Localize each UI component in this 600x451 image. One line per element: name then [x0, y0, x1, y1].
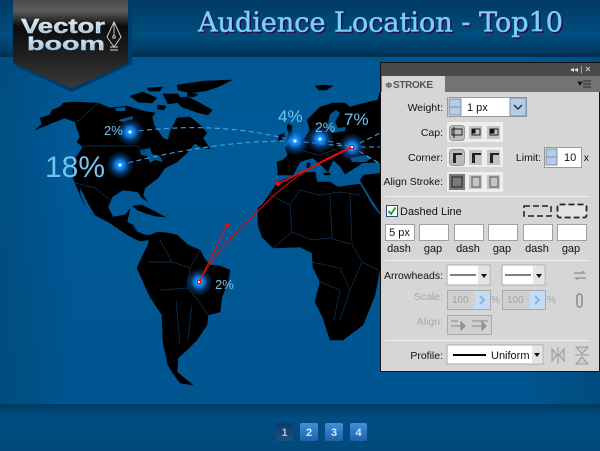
- europe and asia: [277, 90, 392, 175]
- dash and gap labels: dash: [456, 243, 480, 255]
- scale fields: %: [547, 295, 556, 306]
- logo badge: [13, 0, 132, 92]
- dash and gap labels: gap: [562, 243, 580, 255]
- logo wordmark: [21, 16, 105, 54]
- header band: [0, 0, 600, 57]
- dash and gap labels: [387, 227, 580, 255]
- percentage labels: 4%: [278, 107, 303, 126]
- percentage labels: 18%: [45, 151, 105, 184]
- dash and gap labels: dash: [387, 243, 411, 255]
- align arrow buttons: [448, 316, 492, 334]
- percentage labels: 2%: [104, 123, 123, 138]
- arrowhead dropdowns: [447, 265, 545, 285]
- footer band: [0, 404, 600, 451]
- glow marker: north america 2%: [116, 118, 144, 146]
- glow marker: europe 7%: [338, 133, 366, 161]
- panel labels: Align Stroke:: [383, 176, 443, 188]
- dash and gap labels: gap: [493, 243, 511, 255]
- panel labels: Weight:: [408, 102, 443, 114]
- dash and gap labels: 5 px: [389, 227, 410, 239]
- panel tab row: STROKE: [393, 80, 433, 91]
- country borders: [75, 103, 378, 345]
- great lakes: [115, 107, 163, 163]
- cap buttons: [447, 122, 503, 142]
- glow marker: europe 4%: [280, 126, 310, 156]
- scale fields: [448, 290, 556, 310]
- dash alignment icons: [524, 204, 586, 218]
- panel tab row: [381, 76, 600, 92]
- dash and gap labels: dash: [525, 243, 549, 255]
- limit field: 10: [564, 152, 576, 164]
- percentage labels: [45, 107, 369, 292]
- dashed line checkbox: Dashed Line: [400, 206, 462, 218]
- stroke panel: [380, 62, 600, 372]
- logo wordmark: boom: [27, 34, 105, 54]
- dash and gap fields: [386, 224, 586, 240]
- panel labels: Corner:: [408, 152, 443, 164]
- panel labels: x: [584, 152, 590, 164]
- glow marker: europe 2%: [306, 125, 334, 153]
- africa and arabia: [258, 172, 380, 340]
- percentage labels: 2%: [215, 277, 234, 292]
- world map: [35, 80, 392, 385]
- panel tab row: ≑: [385, 80, 393, 90]
- percentage labels: 2%: [315, 119, 335, 135]
- panel labels: Align:: [417, 316, 443, 328]
- weight field: [448, 98, 526, 116]
- panel labels: Scale:: [414, 291, 443, 303]
- panel dividers: [385, 196, 589, 340]
- profile dropdown: Uniform: [491, 350, 530, 362]
- panel labels: Arrowheads:: [384, 270, 443, 282]
- percentage labels: 7%: [344, 110, 369, 129]
- arctic islands: [130, 80, 232, 115]
- north america: [35, 102, 210, 241]
- panel title bar: [381, 63, 600, 76]
- swap icon: [574, 271, 586, 280]
- scale fields: %: [491, 295, 500, 306]
- pagination: 1: [281, 427, 288, 439]
- weight field: 1 px: [467, 102, 488, 114]
- icon: pen nib: [107, 22, 121, 50]
- scale fields: 100: [507, 295, 524, 306]
- panel title bar: ◂◂ | ✕: [570, 65, 591, 74]
- limit field: [544, 148, 582, 168]
- gulf of bothnia and black sea: [327, 110, 372, 162]
- pagination: 3: [331, 427, 337, 439]
- pagination: 4: [355, 427, 362, 439]
- link icon: [577, 294, 582, 307]
- align stroke buttons: [447, 172, 503, 192]
- profile dropdown: [447, 345, 543, 364]
- title: Audience Location - Top10: [198, 9, 564, 40]
- dash and gap labels: gap: [424, 243, 442, 255]
- connection arcs: [120, 128, 382, 165]
- scale fields: 100: [452, 295, 469, 306]
- panel labels: Profile:: [410, 350, 443, 362]
- panel labels: Cap:: [421, 127, 443, 139]
- title: Audience Location - Top10: [197, 8, 563, 38]
- iceland: [315, 85, 333, 90]
- corner buttons: [447, 147, 503, 167]
- glow marker: brazil 2%: [185, 268, 213, 296]
- red arrow paths: [198, 146, 354, 284]
- british isles: [278, 124, 294, 141]
- glow marker: north america 18%: [106, 151, 134, 179]
- panel labels: [383, 102, 590, 362]
- pagination: 2: [306, 427, 312, 439]
- pagination: [276, 423, 367, 441]
- profile flip icons: [552, 347, 589, 364]
- mediterranean islands: [307, 163, 330, 175]
- panel labels: Limit:: [516, 152, 541, 164]
- logo wordmark: Vector: [21, 16, 105, 38]
- cuba: [133, 205, 165, 217]
- south america: [137, 232, 230, 385]
